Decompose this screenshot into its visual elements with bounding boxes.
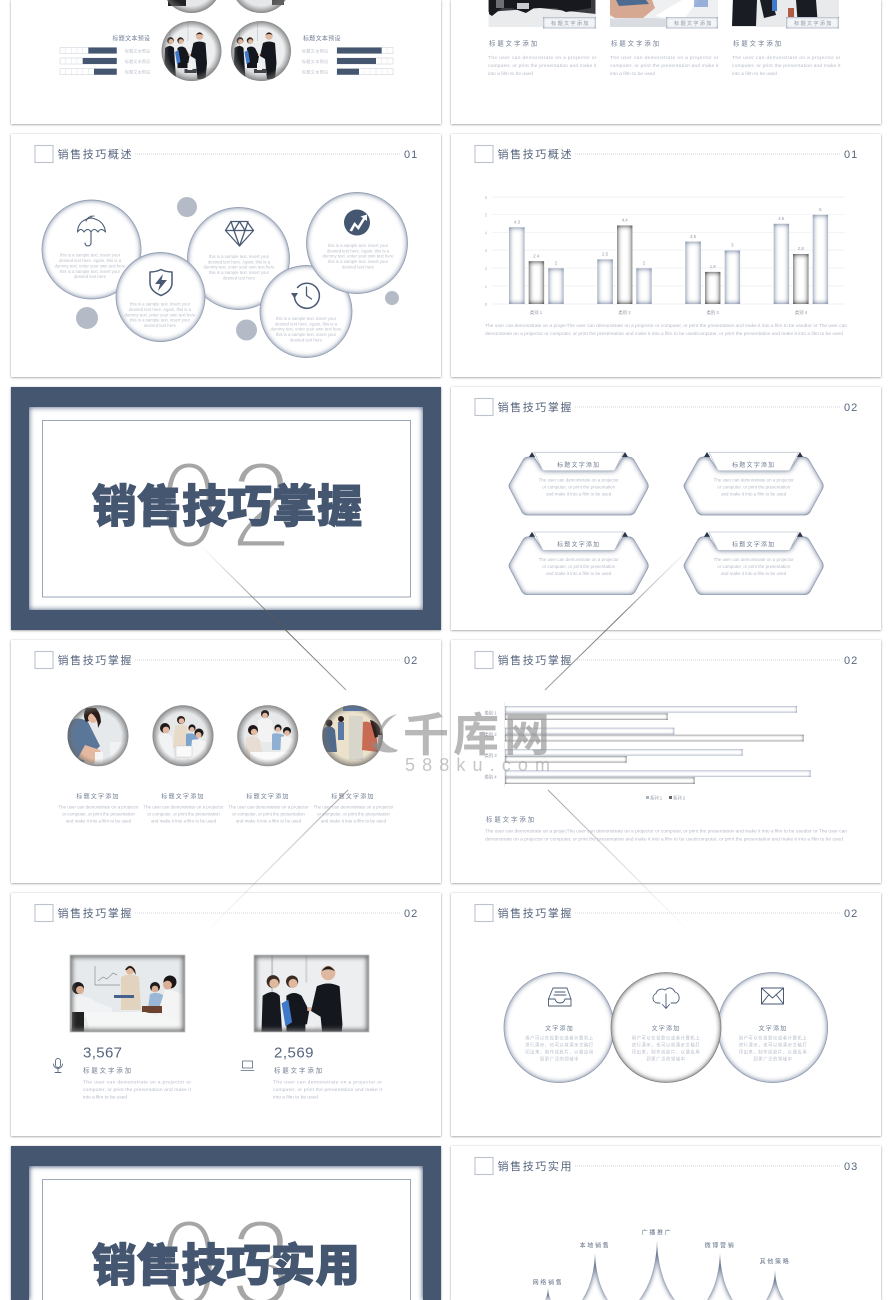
photo: handshake circle left <box>162 21 222 81</box>
icon: cloud download <box>653 988 679 1008</box>
column chart: 0 <box>485 302 488 307</box>
stat 3,567: into a film to be used <box>83 1094 127 1100</box>
card 2: 标题文字添加 <box>732 461 775 469</box>
description text <box>485 323 847 337</box>
column chart: 3.5 <box>690 234 697 239</box>
bar chart <box>484 702 811 802</box>
text: description: 标题文字添加 <box>486 814 534 824</box>
card 1: or computer, or print the presentation <box>542 484 616 490</box>
panel: horizontal bar chart <box>451 640 881 883</box>
heading: 01 <box>844 149 858 161</box>
heading: 02 <box>844 402 858 414</box>
heading <box>475 652 858 668</box>
column chart: 2 <box>485 266 488 271</box>
photo: woman with laptop <box>610 0 718 27</box>
panel: hexagon cards <box>451 387 881 630</box>
circle: envelope <box>718 972 828 1082</box>
heading <box>475 398 858 416</box>
circle: shield <box>116 252 205 342</box>
panel: overview circles <box>11 134 441 377</box>
watermark logo text: 网 <box>504 699 550 765</box>
stat 3,567: computer, or print the presentation and make it <box>83 1087 192 1093</box>
panel: section 02 cover <box>11 387 441 630</box>
skill bars left: 标题文本预设 <box>125 47 150 53</box>
text: column one: 标题文字添加 <box>489 38 537 48</box>
card 1 <box>509 452 648 515</box>
text: column three: into a film to be used <box>732 71 777 77</box>
skill bars left: 标题文本预设 <box>125 68 150 74</box>
heading <box>475 146 858 162</box>
inner white frame <box>29 1166 423 1300</box>
circle: diamond: dummy text. enter your own text here <box>204 265 275 270</box>
thin frame line <box>42 1180 410 1300</box>
column chart: 3 <box>485 248 488 253</box>
card 3: or computer, or print the presentation <box>542 564 616 569</box>
stat 3,567: 3,567 <box>83 1044 122 1062</box>
section title: 销售技巧实用 <box>92 1240 360 1291</box>
heading <box>35 146 418 162</box>
card 2: or computer, or print the presentation <box>717 484 791 490</box>
photo captions <box>543 17 839 28</box>
text: item 4: or computer, or print the presentation <box>317 812 390 816</box>
icon: inbox <box>548 988 571 1006</box>
text: item 1: or computer, or print the presentation <box>62 812 135 816</box>
description text: The user can demonstrate on a projecThe user can demonstrate on a projector or computer, or print the presentation and make it into a film to be usedtor or The user can <box>485 323 847 329</box>
photo captions: 标题文字添加 <box>674 19 712 27</box>
text: column three <box>732 38 841 77</box>
watermark logo text: 588ku.com <box>405 755 550 775</box>
text: item 3: and make it into a film to be used <box>236 818 302 824</box>
column chart: 2.8 <box>798 246 804 251</box>
column chart: 2.4 <box>533 254 540 258</box>
circle: diamond: this is a sample text. insert your <box>209 270 270 275</box>
circle: shield: this is a sample text. insert your <box>130 318 191 322</box>
icon: diamond <box>226 222 254 246</box>
card 3: The user can demonstrate on a projector <box>539 557 619 562</box>
card 1: The user can demonstrate on a projector <box>539 478 619 482</box>
text: column two: into a film to be used <box>610 71 655 77</box>
panel: two photos with numbers <box>11 893 441 1136</box>
text: column two <box>610 38 719 77</box>
circle: diamond: desired text here. Again, this is a <box>208 260 271 264</box>
circle: history: desired text here <box>290 338 323 342</box>
icon: laptop <box>241 1061 254 1070</box>
photo: cropped upper circles <box>162 0 291 13</box>
column chart: 2 <box>643 260 646 266</box>
circle: shield: dummy text. enter your own text here <box>125 312 196 317</box>
spike chart: 广播推广 <box>642 1228 672 1236</box>
large number 02: 0 <box>160 436 218 575</box>
heading <box>35 904 418 922</box>
heading: 销售技巧实用 <box>498 1159 572 1173</box>
photo: meeting <box>70 955 186 1033</box>
text: item 1: 标题文字添加 <box>76 792 120 800</box>
circle: envelope: 进行演示，也可以将演示文稿打 <box>739 1042 807 1048</box>
circle: envelope: 到更广泛的领域中 <box>753 1056 793 1062</box>
text: item 3: or computer, or print the presentation <box>232 812 305 816</box>
large number 02: 2 <box>230 436 292 574</box>
skill bars right: 标题文本预设 <box>302 47 328 53</box>
watermark logo text <box>370 699 550 775</box>
panel: funnel spike chart <box>451 1146 881 1300</box>
card 4: or computer, or print the presentation <box>717 564 791 569</box>
text: item 3: The user can demonstrate on a projector <box>228 804 309 810</box>
column chart: 4.5 <box>778 216 785 221</box>
circle: trend: this is a sample text. insert your <box>328 243 389 248</box>
text: item 3: 标题文字添加 <box>246 792 290 800</box>
stat 2,569: 2,569 <box>274 1044 314 1062</box>
circle: cloud: 文字添加 <box>652 1024 680 1032</box>
spike chart: 网络销售 <box>533 1278 563 1286</box>
circle: history: this is a sample text. insert your <box>276 332 337 337</box>
circle: umbrella: this is a sample text. insert your <box>60 269 121 274</box>
card 3: 标题文字添加 <box>557 541 600 549</box>
circle: shield: desired text here <box>144 323 177 328</box>
heading: 02 <box>844 655 858 667</box>
circle: envelope: 文字添加 <box>759 1024 787 1032</box>
skill bars right: 标题文本预设 <box>302 68 328 74</box>
heading: 01 <box>404 149 418 161</box>
column chart: 1 <box>485 284 488 289</box>
circle: umbrella <box>42 200 141 299</box>
photo: warm office <box>322 705 386 767</box>
column chart <box>485 195 845 316</box>
bar chart: 类别 4 <box>484 774 497 780</box>
bar chart: 类别 2 <box>484 731 497 738</box>
panel: section 03 cover <box>11 1146 441 1300</box>
spike chart: 微博营销 <box>705 1242 735 1250</box>
skill bars right: 标题文本预设 <box>303 34 340 42</box>
bar chart: 类别 3 <box>484 752 497 759</box>
heading: 03 <box>844 1161 858 1173</box>
section title: 销售技巧掌握 <box>92 481 362 532</box>
panel: top-left partial slide with skill bars <box>11 0 441 124</box>
stat 2,569: computer, or print the presentation and make it <box>273 1087 383 1093</box>
text: item 2: or computer, or print the presentation <box>147 812 220 816</box>
heading: 销售技巧掌握 <box>498 400 572 414</box>
text: item 1: and make it into a film to be used <box>66 818 132 824</box>
skill bars right <box>302 34 393 75</box>
text: column one <box>488 38 597 77</box>
circle: umbrella: desired text here. Again, this is a <box>59 258 122 263</box>
stat 2,569: The user can demonstrate on a projector or <box>273 1080 382 1086</box>
card 4: and make it into a film to be used <box>721 571 787 576</box>
circle: cloud: 进行演示，也可以将演示文稿打 <box>632 1042 700 1048</box>
text: item 4: and make it into a film to be used <box>321 818 387 824</box>
column chart: 4.4 <box>622 218 628 223</box>
legend: 系列 1 <box>650 794 663 802</box>
icon: umbrella <box>78 216 106 246</box>
panel: column chart <box>451 134 881 377</box>
text: column two: computer, or print the presentation and make it <box>610 63 719 69</box>
heading: 销售技巧掌握 <box>58 653 132 667</box>
card 2: and make it into a film to be used <box>721 492 787 496</box>
circle: diamond: this is a sample text. insert your <box>209 254 270 259</box>
spike chart: 其他策略 <box>760 1258 790 1266</box>
text: item 4: The user can demonstrate on a projector <box>313 804 394 810</box>
photo: team at table <box>488 0 596 27</box>
circle: inbox: 用户可以在投影仪或者计算机上 <box>525 1034 594 1042</box>
column chart: 4 <box>485 230 488 235</box>
panel: top-right partial slide with three photos <box>451 0 881 124</box>
circle: trend: desired text here <box>342 264 375 270</box>
text: description: The user can demonstrate on a projecThe user can demonstrate on a projector or computer, or print the presentation and make it into a film to be usedtor or The user can <box>485 828 847 834</box>
legend <box>646 794 686 802</box>
card 2: The user can demonstrate on a projector <box>714 478 794 482</box>
text: item 2 <box>143 792 224 824</box>
heading: 销售技巧掌握 <box>58 906 132 920</box>
text: item 2: The user can demonstrate on a projector <box>143 804 224 810</box>
spike chart: 本地销售 <box>580 1242 610 1250</box>
watermark logo text: 库 <box>453 699 499 765</box>
text: item 1: The user can demonstrate on a projector <box>58 804 139 810</box>
stat 2,569: into a film to be used <box>273 1094 318 1100</box>
icon: shield <box>150 270 172 296</box>
circle: umbrella: this is a sample text. insert your <box>60 252 121 258</box>
circle: history <box>260 266 352 358</box>
skill bars left <box>60 34 150 75</box>
column chart: 2.5 <box>602 252 609 256</box>
column chart: 5 <box>485 213 488 218</box>
column chart: 类别 3 <box>707 309 719 316</box>
circle: cloud <box>611 972 721 1082</box>
column chart: 4.3 <box>514 220 521 224</box>
text: column two: 标题文字添加 <box>611 38 659 48</box>
description text: demonstrate on a projector or computer, or print the presentation and make it into a film to be usedcomputer, or print the presentation and make it into a film to be used <box>485 331 843 337</box>
circle: inbox: 印出来，制作成胶片，以便应用 <box>525 1048 594 1056</box>
circle: trend <box>306 192 408 294</box>
spike chart <box>533 1228 790 1300</box>
circle: umbrella: dummy text. enter your own text here <box>55 263 126 268</box>
text: column one: into a film to be used <box>488 71 533 77</box>
column chart: 6 <box>485 195 488 200</box>
heading: 销售技巧掌握 <box>498 653 572 667</box>
text: column two: The user can demonstrate on a projector or <box>610 55 719 61</box>
card 1: and make it into a film to be used <box>546 492 612 496</box>
circle: inbox: 文字添加 <box>545 1024 574 1032</box>
circle: envelope: 用户可以在投影仪或者计算机上 <box>739 1034 807 1042</box>
watermark logo text: 千 <box>403 699 449 765</box>
circle: cloud: 印出来，制作成胶片，以便应用 <box>632 1048 700 1056</box>
column chart: 类别 1 <box>530 309 543 316</box>
stat 3,567 <box>83 1044 192 1100</box>
thin frame line <box>42 420 410 597</box>
circle: history: desired text here. Again, this is a <box>275 322 338 326</box>
skill bars left: 标题文本预设 <box>112 34 150 42</box>
panel: three service circles <box>451 893 881 1136</box>
heading: 销售技巧概述 <box>58 147 132 161</box>
text: item 4 <box>313 792 394 824</box>
card 4: 标题文字添加 <box>732 541 775 549</box>
circle: inbox: 进行演示，也可以将演示文稿打 <box>525 1042 594 1048</box>
text: description: demonstrate on a projector or computer, or print the presentation and make it into a film to be usedcomputer, or print the presentation and make it into a film to be used <box>485 836 843 842</box>
card 3: and make it into a film to be used <box>546 571 612 576</box>
circle: history: dummy text. enter your own text here <box>271 326 342 332</box>
text: item 2: 标题文字添加 <box>161 792 205 800</box>
bar chart: 类别 1 <box>484 710 497 716</box>
heading <box>475 1158 858 1174</box>
skill bars right: 标题文本预设 <box>302 58 328 64</box>
text: description <box>485 814 847 842</box>
icon: microphone <box>54 1058 62 1072</box>
card 4: The user can demonstrate on a projector <box>714 557 794 562</box>
inner white frame <box>29 407 423 610</box>
column chart: 3 <box>731 243 734 248</box>
photo captions: 标题文字添加 <box>794 19 832 27</box>
stat 2,569: 标题文字添加 <box>274 1066 322 1074</box>
photo: business group <box>732 0 839 27</box>
circle: envelope: 印出来，制作成胶片，以便应用 <box>739 1048 807 1056</box>
photo: handshake <box>254 954 370 1032</box>
card 1: 标题文字添加 <box>557 461 600 469</box>
photo: group at desk <box>237 705 299 767</box>
photo: handshake circle right <box>231 21 291 81</box>
icon: history clock <box>291 283 319 308</box>
heading: 销售技巧概述 <box>498 147 572 161</box>
circle: diamond <box>188 208 290 310</box>
large number 03 <box>160 1194 292 1300</box>
circle: cloud: 用户可以在投影仪或者计算机上 <box>632 1034 700 1042</box>
icon: trend arrow <box>344 210 370 236</box>
circle: umbrella: desired text here <box>74 274 107 279</box>
circle: history: this is a sample text. insert your <box>276 316 337 321</box>
circle: trend: this is a sample text. insert your <box>328 259 389 264</box>
circle: diamond: desired text here <box>223 276 256 280</box>
column chart: 2 <box>555 260 558 266</box>
heading <box>475 904 858 922</box>
photo captions: 标题文字添加 <box>551 19 588 27</box>
circle: cloud: 到更广泛的领域中 <box>646 1056 686 1062</box>
circle: trend: dummy text. enter your own text here <box>323 254 394 258</box>
heading: 销售技巧掌握 <box>498 906 572 920</box>
circle: shield: desired text here. Again, this is a <box>129 307 192 312</box>
decorative dots <box>76 197 399 340</box>
stat 2,569 <box>273 1044 383 1100</box>
column chart: 类别 4 <box>795 309 808 316</box>
text: column three: The user can demonstrate on a projector or <box>732 55 841 61</box>
heading: 02 <box>844 908 858 920</box>
card 4 <box>684 532 823 595</box>
panel: four team circles <box>11 640 441 883</box>
column chart: 5 <box>819 207 822 212</box>
stat 3,567: The user can demonstrate on a projector or <box>83 1080 191 1086</box>
text: column three: computer, or print the presentation and make it <box>732 63 841 69</box>
legend: 系列 2 <box>673 794 686 802</box>
circle: shield: this is a sample text. insert your <box>130 302 191 306</box>
card 3 <box>509 532 648 595</box>
heading <box>35 652 418 668</box>
text: item 1 <box>58 792 139 824</box>
skill bars left: 标题文本预设 <box>125 58 150 64</box>
column chart: 1.8 <box>710 264 716 269</box>
stat 3,567: 标题文字添加 <box>83 1066 131 1074</box>
card 2 <box>684 452 823 515</box>
text: item 3 <box>228 792 309 824</box>
circle: inbox <box>504 972 614 1082</box>
photo: woman leaning <box>67 705 130 767</box>
circle: inbox: 到更广泛的领域中 <box>540 1056 579 1062</box>
text: column one: The user can demonstrate on a projector or <box>488 55 597 61</box>
icon: envelope <box>762 988 784 1004</box>
text: column three: 标题文字添加 <box>733 38 781 48</box>
text: item 4: 标题文字添加 <box>331 792 375 800</box>
text: item 2: and make it into a film to be used <box>151 818 217 824</box>
heading: 02 <box>404 908 418 920</box>
column chart: 类别 2 <box>618 309 631 316</box>
large number 02 <box>160 436 292 575</box>
watermark diagonal lines <box>200 545 693 935</box>
text: column one: computer, or print the presentation and make it <box>488 63 597 69</box>
heading: 02 <box>404 655 418 667</box>
circle: trend: desired text here. Again, this is a <box>327 248 390 254</box>
photo: group around laptop <box>152 705 214 767</box>
